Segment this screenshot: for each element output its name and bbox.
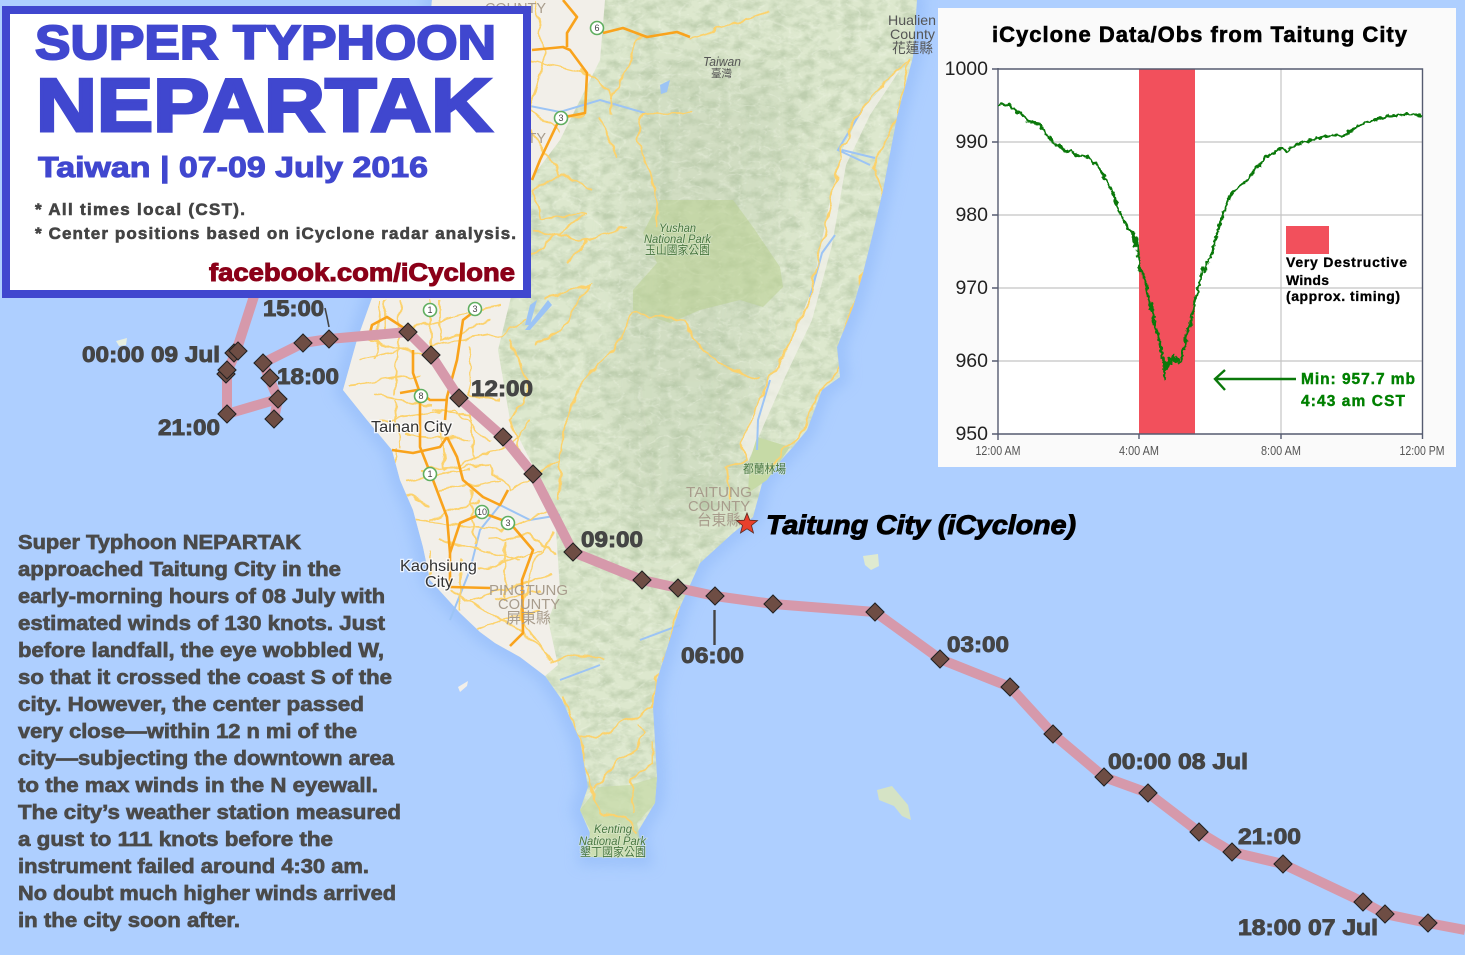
route shields: 1	[427, 305, 433, 315]
map labels: 台東縣	[697, 511, 741, 529]
mountain texture	[480, 0, 920, 860]
text block: storm narrative: estimated winds of 130 knots. Just	[18, 613, 385, 635]
map labels: COUNTY	[498, 596, 560, 613]
y axis labels	[945, 58, 988, 445]
track time labels: 06:00	[681, 643, 744, 668]
text block: storm narrative: city. However, the center passed	[18, 694, 364, 716]
map labels: Tainan City	[371, 419, 452, 436]
x axis labels	[976, 444, 1444, 458]
y axis labels: 960	[955, 350, 988, 372]
legend: Winds	[1286, 272, 1329, 288]
title: super typhoon: SUPER TYPHOON	[35, 16, 496, 70]
minimum pressure callout: 4:43 am CST	[1301, 393, 1406, 410]
map labels: 花蓮縣	[892, 40, 933, 56]
map labels: City	[425, 574, 453, 591]
islands	[116, 338, 911, 820]
x axis labels: 12:00 AM	[976, 444, 1020, 458]
icon: Taitung City star	[736, 513, 758, 533]
text block: storm narrative: city—subjecting the downtown area	[18, 748, 395, 770]
track time labels: 15:00	[263, 296, 324, 321]
x axis labels: 8:00 AM	[1261, 444, 1301, 458]
y axis labels: 1000	[945, 58, 988, 80]
map labels: COUNTY	[485, 0, 546, 17]
map labels: Hualien	[888, 12, 936, 28]
map labels: National Park	[579, 834, 647, 848]
panel: pressure chart	[938, 8, 1456, 467]
map labels: Kenting	[594, 822, 632, 836]
route shields: 3	[558, 113, 564, 123]
x axis labels: 4:00 AM	[1119, 444, 1159, 458]
legend: (approx. timing)	[1286, 288, 1400, 304]
minimum pressure callout: Min: 957.7 mb	[1301, 371, 1415, 388]
note: positions: * Center positions based on iCyclone radar analysis.	[35, 224, 516, 243]
track time labels: 12:00	[471, 376, 533, 401]
coast shadow	[343, 0, 917, 858]
title: Nepartak: NEPARTAK	[36, 63, 492, 147]
subtitle: Taiwan | 07-09 July 2016	[38, 152, 428, 184]
route shields: 3	[472, 304, 478, 314]
track time labels: 21:00	[158, 415, 220, 440]
map labels: TAITUNG	[686, 484, 752, 501]
map labels	[371, 0, 936, 859]
note: times: * All times local (CST).	[35, 200, 245, 219]
grid lines	[998, 69, 1422, 434]
text block: storm narrative: approached Taitung City in the	[18, 559, 341, 581]
arrow: minimum pressure	[1215, 370, 1296, 390]
text block: storm narrative: The city’s weather station measured	[18, 802, 401, 824]
minimum pressure callout	[1301, 371, 1415, 410]
text block: storm narrative: very close—within 12 n mi of the	[18, 721, 357, 743]
text block: storm narrative: Super Typhoon NEPARTAK	[18, 532, 302, 554]
map labels: 臺灣	[711, 66, 732, 80]
rift valley	[740, 62, 905, 462]
map labels: National Park	[644, 232, 712, 246]
y axis labels: 980	[955, 204, 988, 226]
very destructive winds band	[1139, 69, 1195, 434]
freeways	[370, 0, 690, 646]
route shields: 10	[477, 507, 487, 517]
route shields: 1	[427, 469, 433, 479]
track time labels: 18:00 07 Jul	[1238, 915, 1378, 940]
x axis labels: 12:00 PM	[1400, 444, 1444, 458]
typhoon track line	[227, 290, 1465, 930]
track time labels	[82, 296, 1378, 940]
map labels: COUNTY	[485, 130, 546, 147]
text block: storm narrative: No doubt much higher winds arrived	[18, 883, 396, 905]
map labels: 屏東縣	[506, 609, 551, 627]
text block: storm narrative: to the max winds in the N eyewall.	[18, 775, 378, 797]
map labels: Yushan	[659, 221, 696, 235]
track position markers	[217, 323, 1437, 932]
western plain	[343, 0, 605, 676]
Dulan forest	[748, 437, 790, 493]
map labels: 都蘭林場	[743, 462, 786, 476]
track time labels: 00:00 09 Jul	[82, 342, 220, 367]
legend	[1286, 226, 1407, 304]
facebook credit: facebook.com/iCyclone	[209, 259, 515, 287]
Yushan National Park	[633, 200, 783, 323]
text block: storm narrative	[18, 532, 401, 932]
route shields: 3	[505, 518, 511, 528]
map labels: PINGTUNG	[489, 582, 568, 599]
rivers	[450, 100, 875, 680]
track time labels: 18:00	[277, 364, 339, 389]
map labels: County	[890, 26, 935, 42]
legend: Very Destructive	[1286, 254, 1407, 270]
track time labels: 21:00	[1238, 824, 1301, 849]
route shields	[414, 22, 604, 530]
text block: storm narrative: instrument failed around 4:30 am.	[18, 856, 369, 878]
text block: storm narrative: a gust to 111 knots before the	[18, 829, 333, 851]
map labels: Taiwan	[703, 55, 741, 69]
text block: storm narrative: in the city soon after.	[18, 910, 240, 932]
track time labels: 00:00 08 Jul	[1108, 749, 1248, 774]
route shields: 8	[418, 391, 424, 401]
text block: storm narrative: so that it crossed the coast S of the	[18, 667, 392, 689]
text block: storm narrative: before landfall, the eye wobbled W,	[18, 640, 384, 662]
plot axes	[992, 68, 1422, 440]
chart title: iCyclone Data/Obs from Taitung City	[992, 22, 1408, 47]
land mass	[343, 0, 917, 858]
map labels: COUNTY	[688, 498, 750, 515]
y axis labels: 970	[955, 277, 988, 299]
map labels: 玉山國家公園	[645, 242, 710, 257]
y axis labels: 990	[955, 131, 988, 153]
pressure line	[998, 104, 1422, 378]
yellow roads	[350, 0, 910, 833]
track time labels: 09:00	[581, 527, 643, 552]
reservoirs	[525, 80, 670, 330]
panel: title box	[6, 10, 527, 294]
y axis labels: 950	[955, 423, 988, 445]
route shields: 6	[594, 23, 600, 33]
Kenting National Park	[580, 777, 657, 857]
track time labels: 03:00	[947, 632, 1009, 657]
map labels: 墾丁國家公園	[580, 844, 646, 859]
plot background	[998, 69, 1422, 434]
map: Taiwan	[116, 0, 920, 860]
text block: storm narrative: early-morning hours of 08 July with	[18, 586, 385, 608]
map labels: Kaohsiung	[400, 558, 477, 575]
Taitung City label: Taitung City (iCyclone)	[766, 510, 1076, 540]
